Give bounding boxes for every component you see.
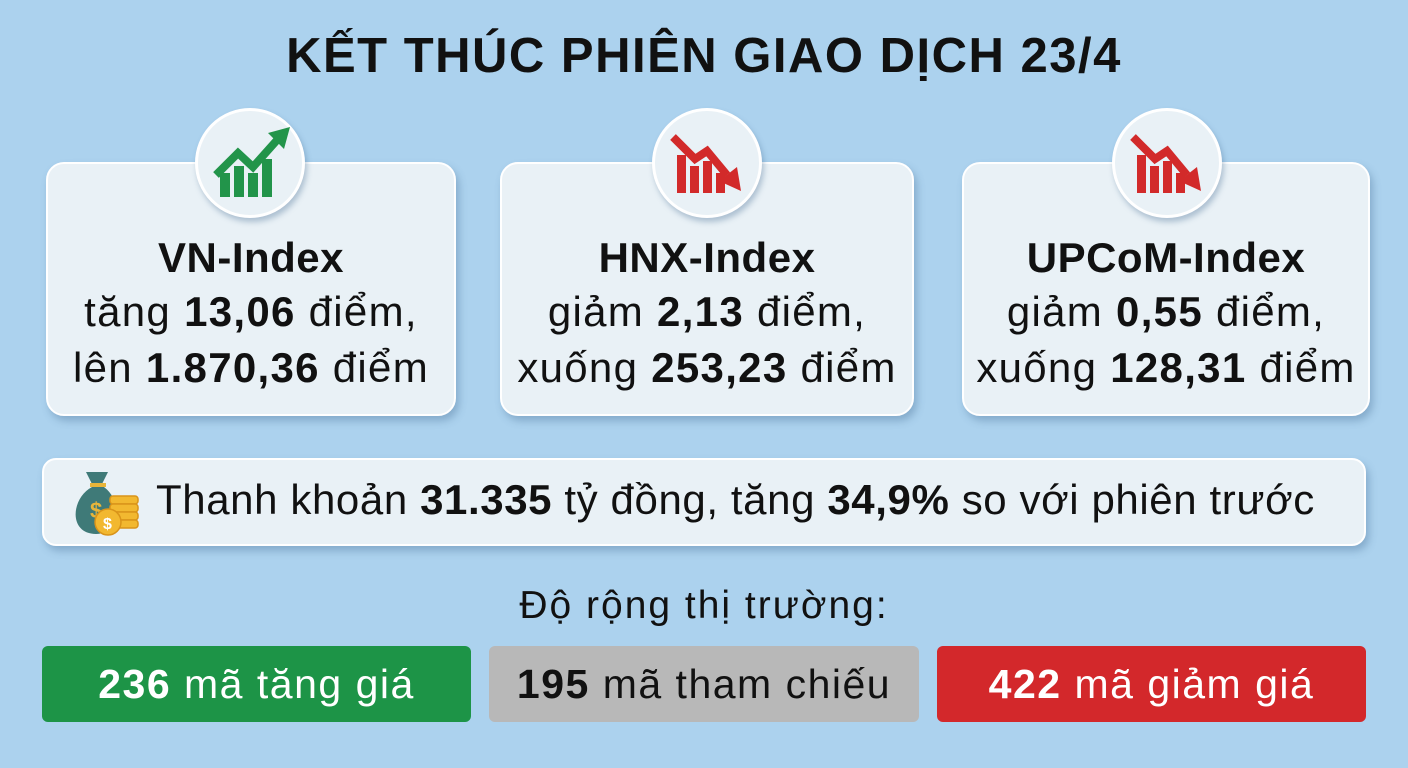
bar: unchanged [489,646,919,722]
icon: up chart [195,108,305,218]
bar: up: 236 mã tăng giá [98,661,415,707]
icon: down chart UPCoM [1112,108,1222,218]
icon: money bag [76,472,139,536]
icon: money bag: $ [103,516,112,533]
panel: HNX-Index [500,162,914,416]
panel: liquidity [42,458,1366,546]
heading: VN-Index: VN-Index [158,234,344,281]
heading: market breadth: Độ rộng thị trường: [519,584,889,627]
icon: down chart HNX [652,108,762,218]
panel: UPCoM-Index [962,162,1370,416]
bar: down [937,646,1366,722]
bar: up [42,646,471,722]
icon: money bag: $ [90,498,102,523]
text: HNX change: giảm 2,13 điểm, [548,288,866,335]
bar: unchanged: 195 mã tham chiếu [517,661,891,707]
panel: VN-Index [46,162,456,416]
heading: UPCoM-Index: UPCoM-Index [1027,234,1305,281]
text: liquidity: Thanh khoản 31.335 tỷ đồng, tăng 34,9% so với phiên trước [156,476,1315,523]
bar: down: 422 mã giảm giá [989,661,1314,707]
text: VN level: lên 1.870,36 điểm [73,344,429,391]
text: VN change: tăng 13,06 điểm, [84,288,418,335]
text: UPCoM level: xuống 128,31 điểm [976,344,1356,391]
text: UPCoM change: giảm 0,55 điểm, [1007,288,1325,335]
text: HNX level: xuống 253,23 điểm [517,344,897,391]
heading: HNX-Index: HNX-Index [599,234,815,281]
title: KẾT THÚC PHIÊN GIAO DỊCH 23/4 [286,29,1122,83]
